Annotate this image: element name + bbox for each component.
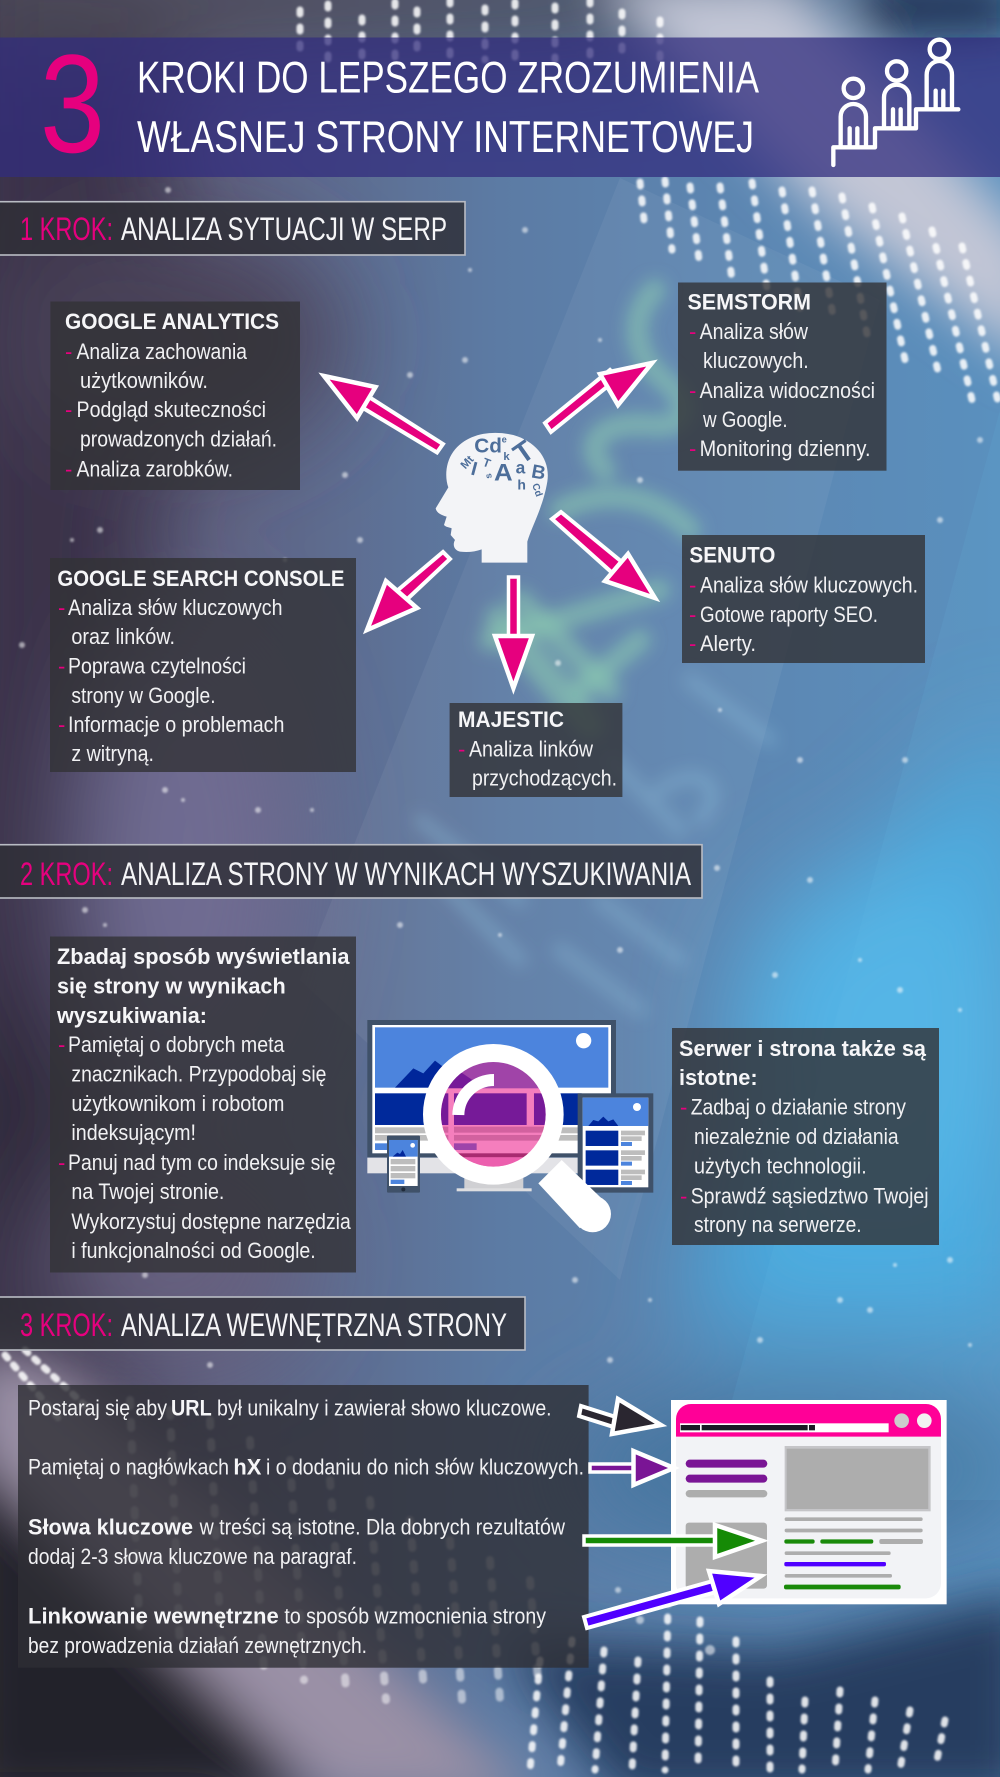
icon: head with letters: h	[517, 476, 526, 492]
panel: internal analysis text: Linkowanie wewnętrzne	[28, 1604, 279, 1629]
diagonal glass planes	[300, 178, 880, 1280]
panel: internal analysis text: Pamiętaj o nagłówkach	[28, 1454, 229, 1479]
panel: Google Analytics: użytkowników.	[80, 368, 208, 393]
panel: Google Search Console: GOOGLE SEARCH CONSOLE	[57, 566, 344, 591]
icon: head with letters: Cd	[529, 482, 544, 498]
panel: search result display: -	[58, 1150, 65, 1175]
panel: Senuto: Analiza słów kluczowych.	[700, 573, 918, 598]
panel: Senuto: -	[689, 573, 696, 598]
icon: head with letters: T	[481, 455, 493, 471]
icon: head with letters: s	[483, 473, 494, 479]
panel: Google Search Console: Poprawa czytelności	[68, 653, 246, 678]
arrow: to Majestic	[495, 577, 532, 688]
panel: search result display: i funkcjonalności od Google.	[71, 1238, 316, 1263]
icon: head with letters: B	[530, 461, 547, 485]
section bar: step 3 heading	[0, 1297, 525, 1350]
panel: Semstorm: -	[689, 319, 696, 344]
panel: search result display: użytkownikom i robotom	[71, 1091, 284, 1116]
magnifying glass	[423, 1044, 611, 1232]
section bar: step 3 heading: ANALIZA WEWNĘTRZNA STRONY	[121, 1307, 507, 1343]
icon: head with letters: e	[502, 434, 507, 444]
panel: internal analysis text: dodaj 2-3 słowa kluczowe na paragraf.	[28, 1544, 357, 1569]
panel: Semstorm	[678, 282, 886, 471]
panel: server and site: -	[680, 1184, 687, 1209]
arrow: to Semstorm	[545, 363, 652, 432]
panel: Google Search Console: strony w Google.	[71, 683, 216, 708]
big number 3: 3	[40, 25, 105, 182]
panel: Google Analytics: Analiza zarobków.	[76, 456, 233, 482]
panel: internal analysis text: Postaraj się aby	[28, 1396, 167, 1421]
panel: server and site	[672, 1028, 939, 1245]
panel: Google Analytics: -	[65, 397, 72, 422]
browser top bar	[676, 1404, 941, 1437]
panel: Google Analytics: Analiza zachowania	[76, 339, 248, 364]
monitor	[367, 1020, 616, 1191]
section bar: step 3 heading: 3 KROK:	[20, 1307, 113, 1343]
arrow: internal linking to link	[584, 1571, 761, 1628]
faint blue lettering shapes	[420, 680, 770, 1010]
phone	[387, 1136, 420, 1193]
panel: Majestic: -	[458, 736, 465, 762]
title	[137, 54, 759, 162]
panel: Senuto: -	[689, 631, 696, 656]
panel: search result display: znacznikach. Przypodobaj się	[71, 1062, 326, 1087]
icon: head with letters	[436, 433, 548, 563]
panel: Semstorm: SEMSTORM	[688, 290, 811, 315]
panel: internal analysis text: to sposób wzmocnienia strony	[284, 1604, 546, 1629]
illustration: web page layout	[671, 1400, 947, 1604]
panel: search result display: się strony w wynikach	[57, 973, 286, 998]
panel: Google Analytics: GOOGLE ANALYTICS	[65, 309, 279, 334]
panel: Majestic: przychodzących.	[472, 765, 617, 790]
panel: Semstorm: Monitoring dzienny.	[700, 436, 870, 461]
faint green shapes	[490, 290, 690, 725]
arrow: hX to headings	[590, 1451, 674, 1485]
section bar: step 2 heading: 2 KROK:	[20, 856, 113, 892]
panel: internal analysis text: URL	[171, 1396, 212, 1421]
panel: search result display: indeksującym!	[71, 1120, 196, 1145]
panel: server and site: Zadbaj o działanie strony	[691, 1095, 906, 1120]
panel: search result display: Panuj nad tym co indeksuje się	[68, 1150, 336, 1175]
panel: Google Search Console: oraz linków.	[71, 624, 175, 649]
panel: Senuto: Alerty.	[700, 631, 756, 656]
section bar: step 2 heading: ANALIZA STRONY W WYNIKACH WYSZUKIWANIA	[121, 856, 691, 892]
panel: Semstorm: kluczowych.	[703, 348, 809, 373]
bokeh specks	[19, 187, 983, 1655]
panel: server and site: -	[680, 1095, 687, 1120]
panel: server and site: Sprawdź sąsiedztwo Twojej	[691, 1184, 929, 1209]
panel: Google Analytics	[50, 302, 300, 490]
arrow: to Google Analytics	[324, 376, 443, 452]
panel: Google Search Console: z witryną.	[71, 741, 154, 766]
panel: internal analysis text: i o dodaniu do nich słów kluczowych.	[266, 1454, 584, 1479]
panel: server and site: użytych technologii.	[694, 1153, 867, 1178]
panel: Semstorm: -	[689, 378, 696, 403]
panel: Senuto	[682, 535, 925, 663]
icon: head with letters: T	[508, 434, 540, 471]
panel: internal analysis text: hX	[233, 1454, 262, 1479]
panel: Senuto: SENUTO	[689, 542, 775, 568]
section bar: step 2 heading	[0, 845, 702, 898]
icon: people on stairs	[833, 40, 958, 165]
icon: head with letters: k	[503, 451, 510, 463]
panel: Majestic: Analiza linków	[469, 736, 593, 762]
panel: Senuto: Gotowe raporty SEO.	[700, 602, 878, 627]
section bar: step 1 heading	[0, 202, 465, 255]
section bar: step 1 heading: ANALIZA SYTUACJI W SERP	[121, 211, 447, 247]
arrow: to Google Search Console	[367, 552, 450, 630]
panel: Majestic: MAJESTIC	[458, 707, 564, 732]
panel: server and site: Serwer i strona także są	[679, 1036, 927, 1061]
panel: Google Analytics: -	[65, 339, 72, 364]
panel: Google Search Console: -	[58, 712, 65, 737]
panel: Google Analytics: prowadzonych działań.	[80, 427, 277, 452]
title: WŁASNEJ STRONY INTERNETOWEJ	[137, 113, 754, 162]
panel: Google Search Console: Analiza słów kluczowych	[68, 595, 282, 620]
panel: Semstorm: Analiza widoczności	[700, 378, 875, 403]
tablet	[578, 1093, 653, 1193]
panel: search result display: Pamiętaj o dobrych meta	[68, 1032, 285, 1057]
icon: head with letters: A	[494, 460, 513, 487]
panel: Google Search Console	[50, 558, 356, 772]
icon: head with letters: I	[469, 459, 479, 480]
panel: internal analysis text	[18, 1385, 589, 1668]
panel: search result display: wyszukiwania:	[56, 1003, 207, 1028]
panel: search result display: Wykorzystuj dostępne narzędzia	[71, 1209, 351, 1234]
panel: server and site: istotne:	[679, 1065, 758, 1090]
panel: search result display: -	[58, 1032, 65, 1057]
panel: search result display: na Twojej stronie.	[71, 1179, 224, 1204]
panel: Majestic	[450, 703, 622, 797]
header band	[0, 25, 1000, 182]
panel: internal analysis text: w treści są istotne. Dla dobrych rezultatów	[199, 1515, 565, 1540]
section bar: step 1 heading: 1 KROK:	[20, 211, 113, 247]
icon: head with letters: Cd	[474, 434, 502, 457]
panel: Semstorm: Analiza słów	[700, 319, 808, 344]
panel: Semstorm: -	[689, 436, 696, 461]
panel: internal analysis text: bez prowadzenia działań zewnętrznych.	[28, 1633, 367, 1658]
icon: devices under magnifying glass	[367, 1020, 653, 1232]
arrow: keywords to text	[584, 1525, 762, 1557]
icon: head with letters: Mt	[459, 454, 477, 472]
panel: Google Analytics: Podgląd skuteczności	[76, 397, 266, 422]
panel: search result display: Zbadaj sposób wyświetlania	[57, 944, 350, 969]
panel: internal analysis text: Słowa kluczowe	[28, 1515, 193, 1540]
panel: Senuto: -	[689, 602, 696, 627]
arrow: to Senuto	[552, 512, 655, 598]
panel: search result display	[50, 936, 356, 1272]
arrow: URL to address bar	[579, 1399, 661, 1434]
panel: server and site: niezależnie od działania	[694, 1124, 899, 1149]
panel: Google Search Console: -	[58, 653, 65, 678]
panel: Google Analytics: -	[65, 456, 72, 482]
panel: Semstorm: w Google.	[702, 407, 788, 432]
panel: Google Search Console: Informacje o problemach	[68, 712, 284, 737]
panel: internal analysis text: był unikalny i zawierał słowo kluczowe.	[217, 1396, 552, 1421]
panel: server and site: strony na serwerze.	[694, 1212, 862, 1237]
panel: Google Search Console: -	[58, 595, 65, 620]
title: KROKI DO LEPSZEGO ZROZUMIENIA	[137, 54, 759, 102]
icon: head with letters: a	[516, 457, 526, 477]
